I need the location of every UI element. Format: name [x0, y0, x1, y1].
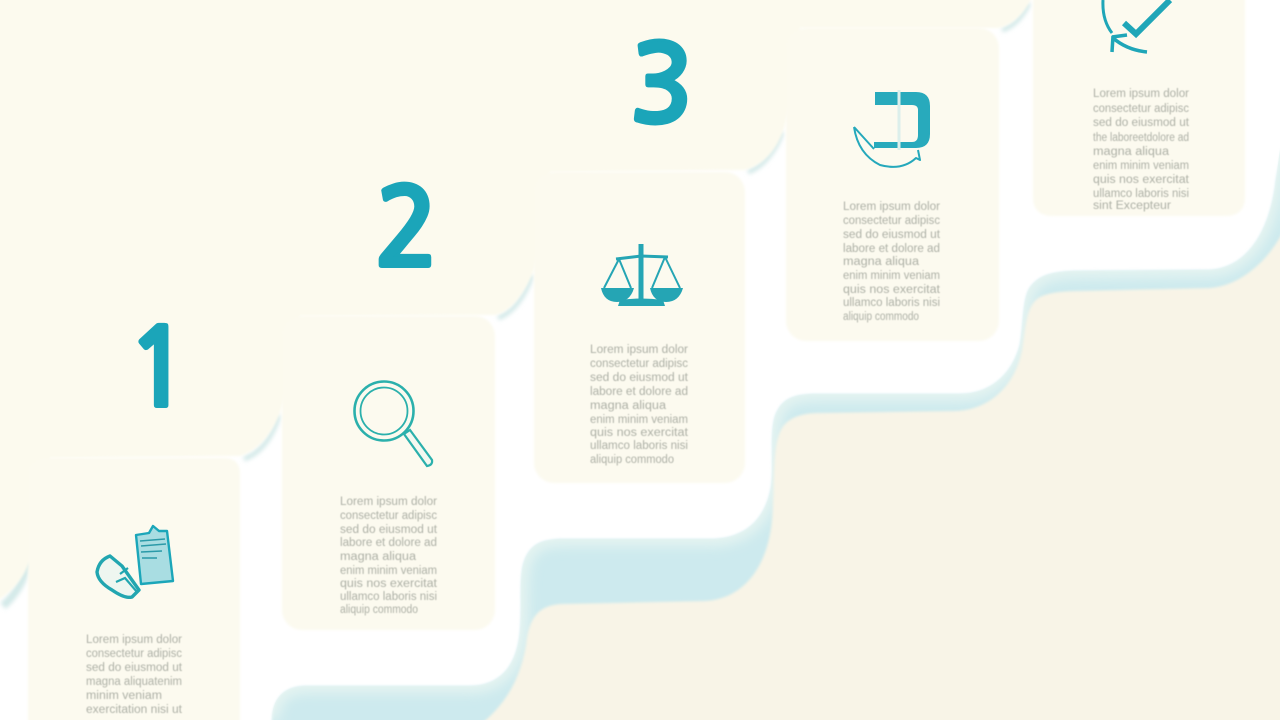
text block 1: consectetur adipisc [86, 648, 182, 660]
icon: check mark with circular arrow [1103, 0, 1170, 52]
text block 2: magna aliqua [340, 551, 417, 563]
text block 4: sed do eiusmod ut [843, 229, 941, 241]
text block 3: labore et dolore ad [590, 386, 688, 398]
text block 3: enim minim veniam [590, 414, 688, 426]
icon: balance scales [601, 244, 683, 306]
text block 2 [340, 496, 438, 616]
text block 1: minim veniam [86, 690, 162, 702]
text block 5: ullamco laboris nisi [1093, 188, 1189, 200]
text block 2: aliquip commodo [340, 604, 418, 616]
light blue wave band [272, 148, 1280, 720]
text block 1 [86, 634, 183, 716]
text block 4: enim minim veniam [843, 270, 940, 282]
panel: step 3 [534, 33, 745, 483]
text block 4 [843, 201, 941, 323]
text block 5: Lorem ipsum dolor [1093, 88, 1189, 100]
text block 5: quis nos exercitat [1093, 174, 1190, 186]
icon: document and curved arrow [854, 90, 930, 167]
panel: step 4 [786, 28, 999, 341]
text block 1: sed do eiusmod ut [86, 662, 183, 674]
text block 2: quis nos exercitat [340, 578, 438, 590]
text block 5: enim minim veniam [1093, 160, 1189, 172]
light blue step corner accents [3, 3, 1029, 606]
text block 1: exercitation nisi ut [86, 704, 183, 716]
text block 3: sed do eiusmod ut [590, 372, 689, 384]
text block 4: consectetur adipisc [843, 215, 940, 227]
text block 1: magna aliquatenim [86, 676, 182, 688]
text block 2: Lorem ipsum dolor [340, 496, 437, 508]
text block 5: magna aliqua [1093, 146, 1170, 158]
text block 3: Lorem ipsum dolor [590, 344, 688, 356]
text block 2: labore et dolore ad [340, 537, 437, 549]
cream staircase region, upper left [0, 0, 1033, 602]
text block 5: sed do eiusmod ut [1093, 117, 1190, 129]
text block 2: enim minim veniam [340, 565, 437, 577]
panel: step 1 [28, 316, 240, 720]
text block 2: sed do eiusmod ut [340, 524, 438, 536]
text block 4: quis nos exercitat [843, 284, 941, 296]
panel: step 5 [1033, 0, 1245, 216]
card 2 [282, 316, 495, 630]
text block 3: aliquip commodo [590, 454, 674, 466]
text block 1: Lorem ipsum dolor [86, 634, 182, 646]
text block 4: aliquip commodo [843, 311, 919, 323]
card 4 [786, 28, 999, 341]
beige ground, lower right [480, 228, 1280, 720]
text block 5: consectetur adipisc [1093, 103, 1189, 115]
text block 3: consectetur adipisc [590, 358, 688, 370]
card 3 [534, 172, 745, 483]
wave band pale top edge [272, 148, 1280, 720]
text block 4: labore et dolore ad [843, 243, 940, 255]
text block 3: ullamco laboris nisi [590, 440, 688, 452]
text block 4: Lorem ipsum dolor [843, 201, 940, 213]
panel: step 2 [282, 176, 495, 630]
text block 5: sint Excepteur [1093, 200, 1171, 212]
text block 4: ullamco laboris nisi [843, 297, 940, 309]
text block 2: consectetur adipisc [340, 510, 437, 522]
number 3: 3 [629, 33, 694, 140]
text block 3: quis nos exercitat [590, 427, 689, 439]
text block 5 [1093, 88, 1190, 212]
card 5 [1033, 0, 1245, 216]
card 1 [28, 458, 240, 720]
icon: clipboard and hand [97, 526, 173, 597]
text block 3 [590, 344, 689, 466]
text block 3: magna aliqua [590, 400, 667, 412]
number 2: 2 [374, 176, 439, 283]
text block 5: the laboreetdolore ad [1093, 132, 1189, 144]
text block 2: ullamco laboris nisi [340, 591, 437, 603]
icon: magnifying glass [354, 382, 432, 466]
number 1: 1 [126, 316, 191, 423]
text block 4: magna aliqua [843, 256, 920, 268]
